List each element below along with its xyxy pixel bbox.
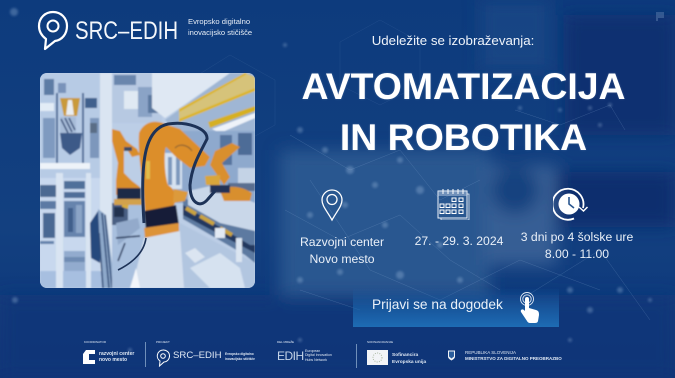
network mark: EDIH — [277, 349, 304, 363]
location text — [300, 235, 384, 266]
partner: coordinator Razvojni center — [83, 340, 134, 364]
background machinery right — [165, 131, 255, 203]
lower centre — [112, 203, 150, 288]
yellow gantry — [179, 73, 255, 121]
dark collar and flange — [144, 205, 179, 230]
icon: clock with arrow — [553, 188, 588, 221]
logo tagline: Evropsko digitalno — [188, 17, 250, 26]
location text: Novo mesto — [309, 252, 375, 266]
network name: Hubs Network — [305, 358, 327, 362]
partner: ministry — [448, 350, 562, 361]
date text: 27. - 29. 3. 2024 — [415, 234, 503, 248]
co-funding text: Evropska unija — [392, 360, 426, 364]
logo tagline: inovacijsko stičišče — [188, 28, 252, 37]
divider one — [145, 342, 146, 367]
ministry name: MINISTRSTVO ZA DIGITALNO PREOBRAZBO — [465, 356, 562, 361]
logo tagline — [188, 17, 252, 37]
network name: European — [305, 349, 320, 353]
icon: logo pin — [38, 10, 68, 50]
ministry name: REPUBLIKA SLOVENIJA — [465, 350, 516, 355]
main robot arm — [139, 122, 210, 211]
icon: calendar — [438, 189, 470, 220]
title: IN ROBOTIKA — [340, 116, 587, 158]
coordinator caption: KOORDINATOR — [84, 340, 106, 344]
cables — [143, 123, 215, 223]
partner: project SRC-EDIH — [156, 340, 255, 367]
project caption: PROJEKT — [156, 340, 170, 344]
icon: tapping hand — [520, 292, 539, 323]
project wordmark: SRC–EDIH — [173, 350, 222, 361]
project tagline: Evropsko digitalno — [225, 352, 254, 356]
event detail: date — [415, 189, 504, 248]
coordinator name: razvojni center — [99, 351, 134, 357]
event detail: location — [300, 189, 384, 266]
partner: EDIH network — [277, 340, 332, 363]
divider two — [356, 344, 357, 368]
subtitle: Udeležite se izobraževanja: — [372, 33, 534, 48]
conveyor — [90, 211, 102, 263]
icon: EU flag — [367, 350, 388, 365]
logo wordmark: SRC–EDIH — [75, 17, 178, 45]
project tagline: inovacijsko stičišče — [225, 356, 255, 360]
title: AVTOMATIZACIJA — [301, 65, 626, 107]
coordinator name — [99, 351, 134, 363]
floor right — [170, 223, 255, 288]
corner flag mark — [656, 12, 664, 21]
coordinator name: novo mesto — [99, 357, 127, 363]
logo: SRC-EDIH header — [38, 10, 252, 50]
duration text — [521, 230, 633, 260]
network name: Digital Innovation — [305, 353, 332, 357]
event detail: duration — [521, 188, 633, 260]
network caption: DEL MREŽE — [277, 340, 294, 344]
duration text: 8.00 - 11.00 — [545, 246, 609, 260]
ministry name — [465, 350, 562, 361]
photo: industrial robot arm on production line — [40, 73, 255, 288]
icon: location pin — [321, 189, 343, 222]
co-funding text — [392, 352, 426, 364]
robot pedestal — [132, 231, 184, 288]
footer logos strip — [83, 340, 562, 368]
title — [301, 65, 626, 158]
button: register — [353, 287, 559, 327]
third and fourth robots — [210, 143, 240, 185]
project tagline — [225, 352, 255, 361]
second robot — [112, 129, 140, 195]
icon: project pin — [156, 350, 170, 367]
factory wall upper left — [40, 73, 100, 178]
lower left windows — [40, 178, 100, 288]
button label: Prijavi se na dogodek — [372, 297, 503, 312]
partner: EU co-funding — [367, 340, 426, 365]
co-funding caption: SOFINANCIRANJE — [367, 340, 393, 344]
co-funding text: Sofinancira — [392, 353, 418, 358]
roof — [152, 73, 230, 118]
column — [100, 73, 112, 288]
network name — [305, 349, 332, 362]
upper centre windows — [112, 73, 162, 123]
location text: Razvojni center — [300, 235, 384, 249]
work table — [183, 198, 255, 263]
icon: Slovenian crest — [448, 350, 455, 360]
icon: coordinator logo — [83, 350, 95, 364]
duration text: 3 dni po 4 šolske ure — [521, 230, 633, 244]
